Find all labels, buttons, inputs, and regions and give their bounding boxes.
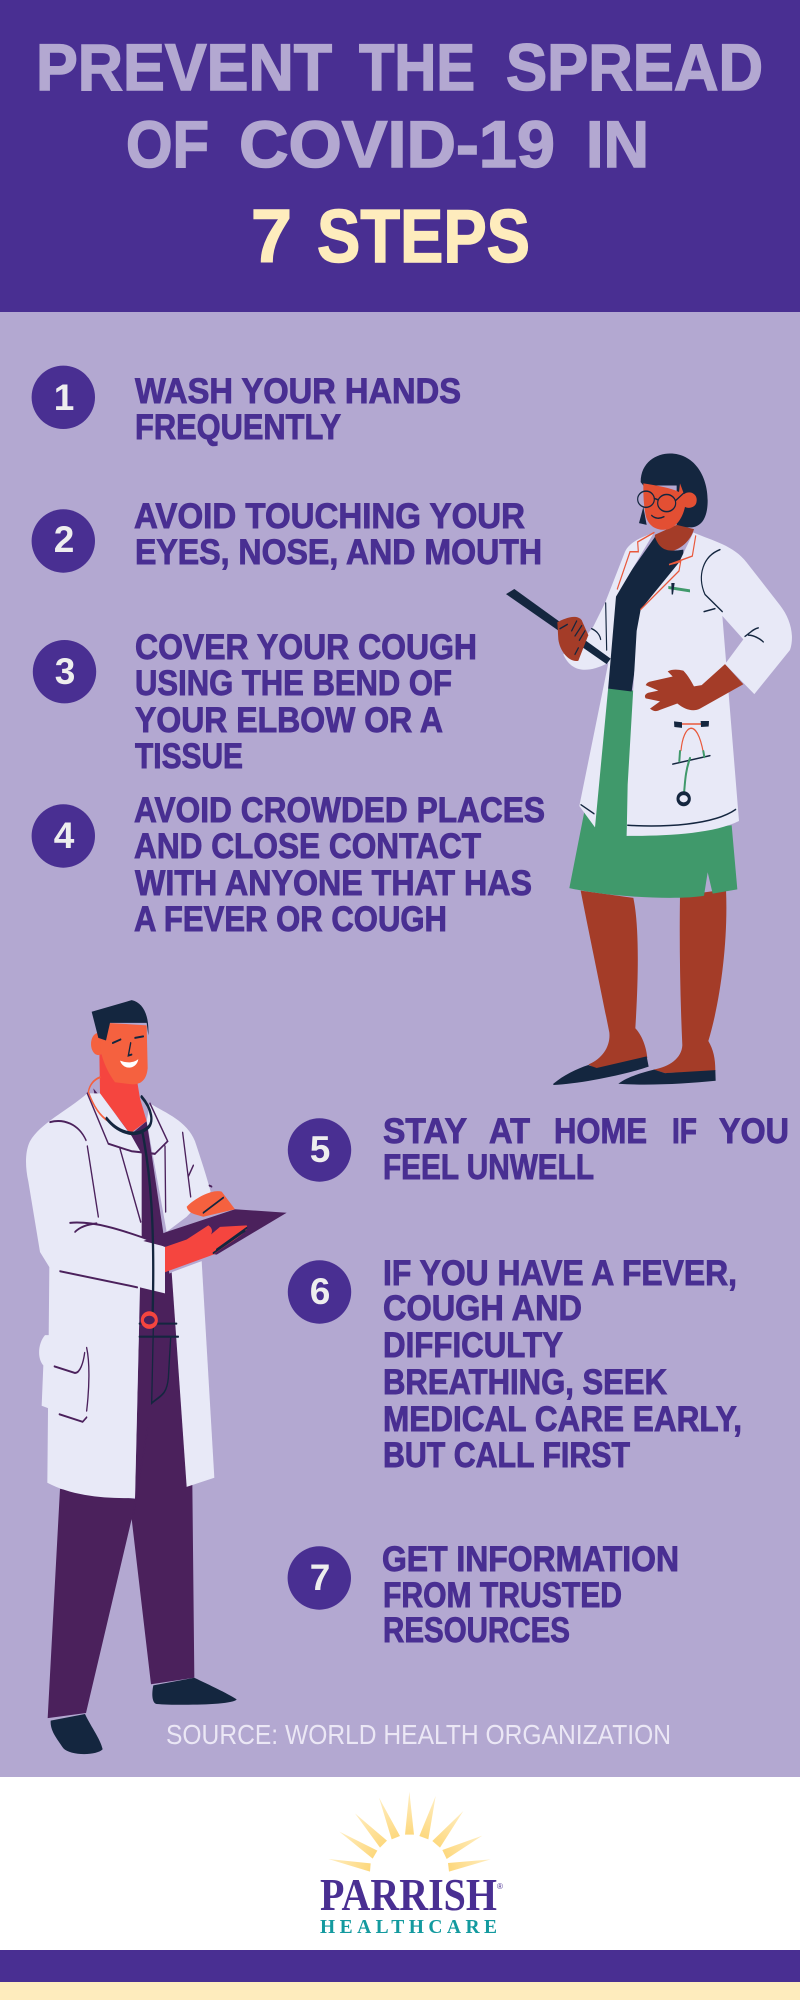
title line 1: PREVENT xyxy=(36,30,332,104)
step 4 xyxy=(32,790,545,939)
step 6: BREATHING, SEEK xyxy=(383,1362,667,1402)
step 7: RESOURCES xyxy=(383,1610,570,1650)
step 5: STAY xyxy=(383,1111,467,1151)
title line 3: 7 steps: STEPS xyxy=(317,194,530,278)
step 5 xyxy=(288,1111,789,1187)
step 7: GET INFORMATION xyxy=(382,1539,679,1579)
step 3: YOUR ELBOW OR A xyxy=(135,700,443,740)
step 5: AT xyxy=(489,1111,530,1151)
step 6: IF YOU HAVE A FEVER, xyxy=(383,1253,737,1293)
step 5: HOME xyxy=(554,1111,647,1151)
step 2: AVOID TOUCHING YOUR xyxy=(134,496,525,536)
step 4: AVOID CROWDED PLACES xyxy=(134,790,545,830)
illustration: female doctor xyxy=(506,454,792,1085)
panel: main lavender background xyxy=(0,312,800,1777)
step 2 xyxy=(32,496,542,573)
title line 1: SPREAD xyxy=(506,30,763,104)
panel: header xyxy=(0,0,800,312)
step 1 xyxy=(32,366,461,447)
illustration: male doctor xyxy=(26,1000,287,1754)
step 4: WITH ANYONE THAT HAS xyxy=(135,863,532,903)
logo: Parrish Healthcare: HEALTHCARE xyxy=(320,1917,497,1938)
logo sun rays xyxy=(328,1792,491,1872)
step 7: 7 xyxy=(310,1557,330,1598)
step 4: AND CLOSE CONTACT xyxy=(134,826,481,866)
logo: Parrish Healthcare: PARRISH xyxy=(320,1869,497,1920)
step 4: 4 xyxy=(54,815,75,856)
step 6: 6 xyxy=(310,1271,330,1312)
step 6: COUGH AND xyxy=(383,1288,582,1328)
step 1: FREQUENTLY xyxy=(135,407,341,447)
step 7: FROM TRUSTED xyxy=(383,1575,622,1615)
step 5: IF xyxy=(672,1111,697,1151)
step 5: FEEL UNWELL xyxy=(383,1147,594,1187)
title line 2: IN xyxy=(586,107,649,181)
step 3: COVER YOUR COUGH xyxy=(135,627,477,667)
step 6: MEDICAL CARE EARLY, xyxy=(383,1399,742,1439)
step 6 xyxy=(288,1253,742,1475)
title line 3: 7 steps: 7 xyxy=(251,194,292,278)
logo: Parrish Healthcare: ® xyxy=(497,1882,503,1891)
step 5: YOU xyxy=(719,1111,789,1151)
step 4: A FEVER OR COUGH xyxy=(134,899,447,939)
step 6: BUT CALL FIRST xyxy=(383,1435,630,1475)
panel: logo footer xyxy=(0,1777,800,1950)
source credit: SOURCE: WORLD HEALTH ORGANIZATION xyxy=(166,1719,671,1750)
step 2: EYES, NOSE, AND MOUTH xyxy=(135,532,542,572)
title line 1: THE xyxy=(359,30,475,104)
step 6: DIFFICULTY xyxy=(383,1325,563,1365)
step 1: WASH YOUR HANDS xyxy=(135,371,461,411)
logo: Parrish Healthcare xyxy=(320,1792,503,1938)
step 3: TISSUE xyxy=(135,736,243,776)
step 7 xyxy=(288,1539,679,1650)
step 5: 5 xyxy=(310,1129,330,1170)
step 3: USING THE BEND OF xyxy=(135,663,452,703)
title line 2: COVID-19 xyxy=(239,107,555,181)
footer band: cream xyxy=(0,1982,800,2000)
title line 2: OF xyxy=(126,107,209,181)
step 2: 2 xyxy=(54,519,74,560)
step 3: 3 xyxy=(55,651,75,692)
footer band: purple xyxy=(0,1950,800,1982)
step 1: 1 xyxy=(54,377,74,418)
step 3 xyxy=(33,627,477,776)
